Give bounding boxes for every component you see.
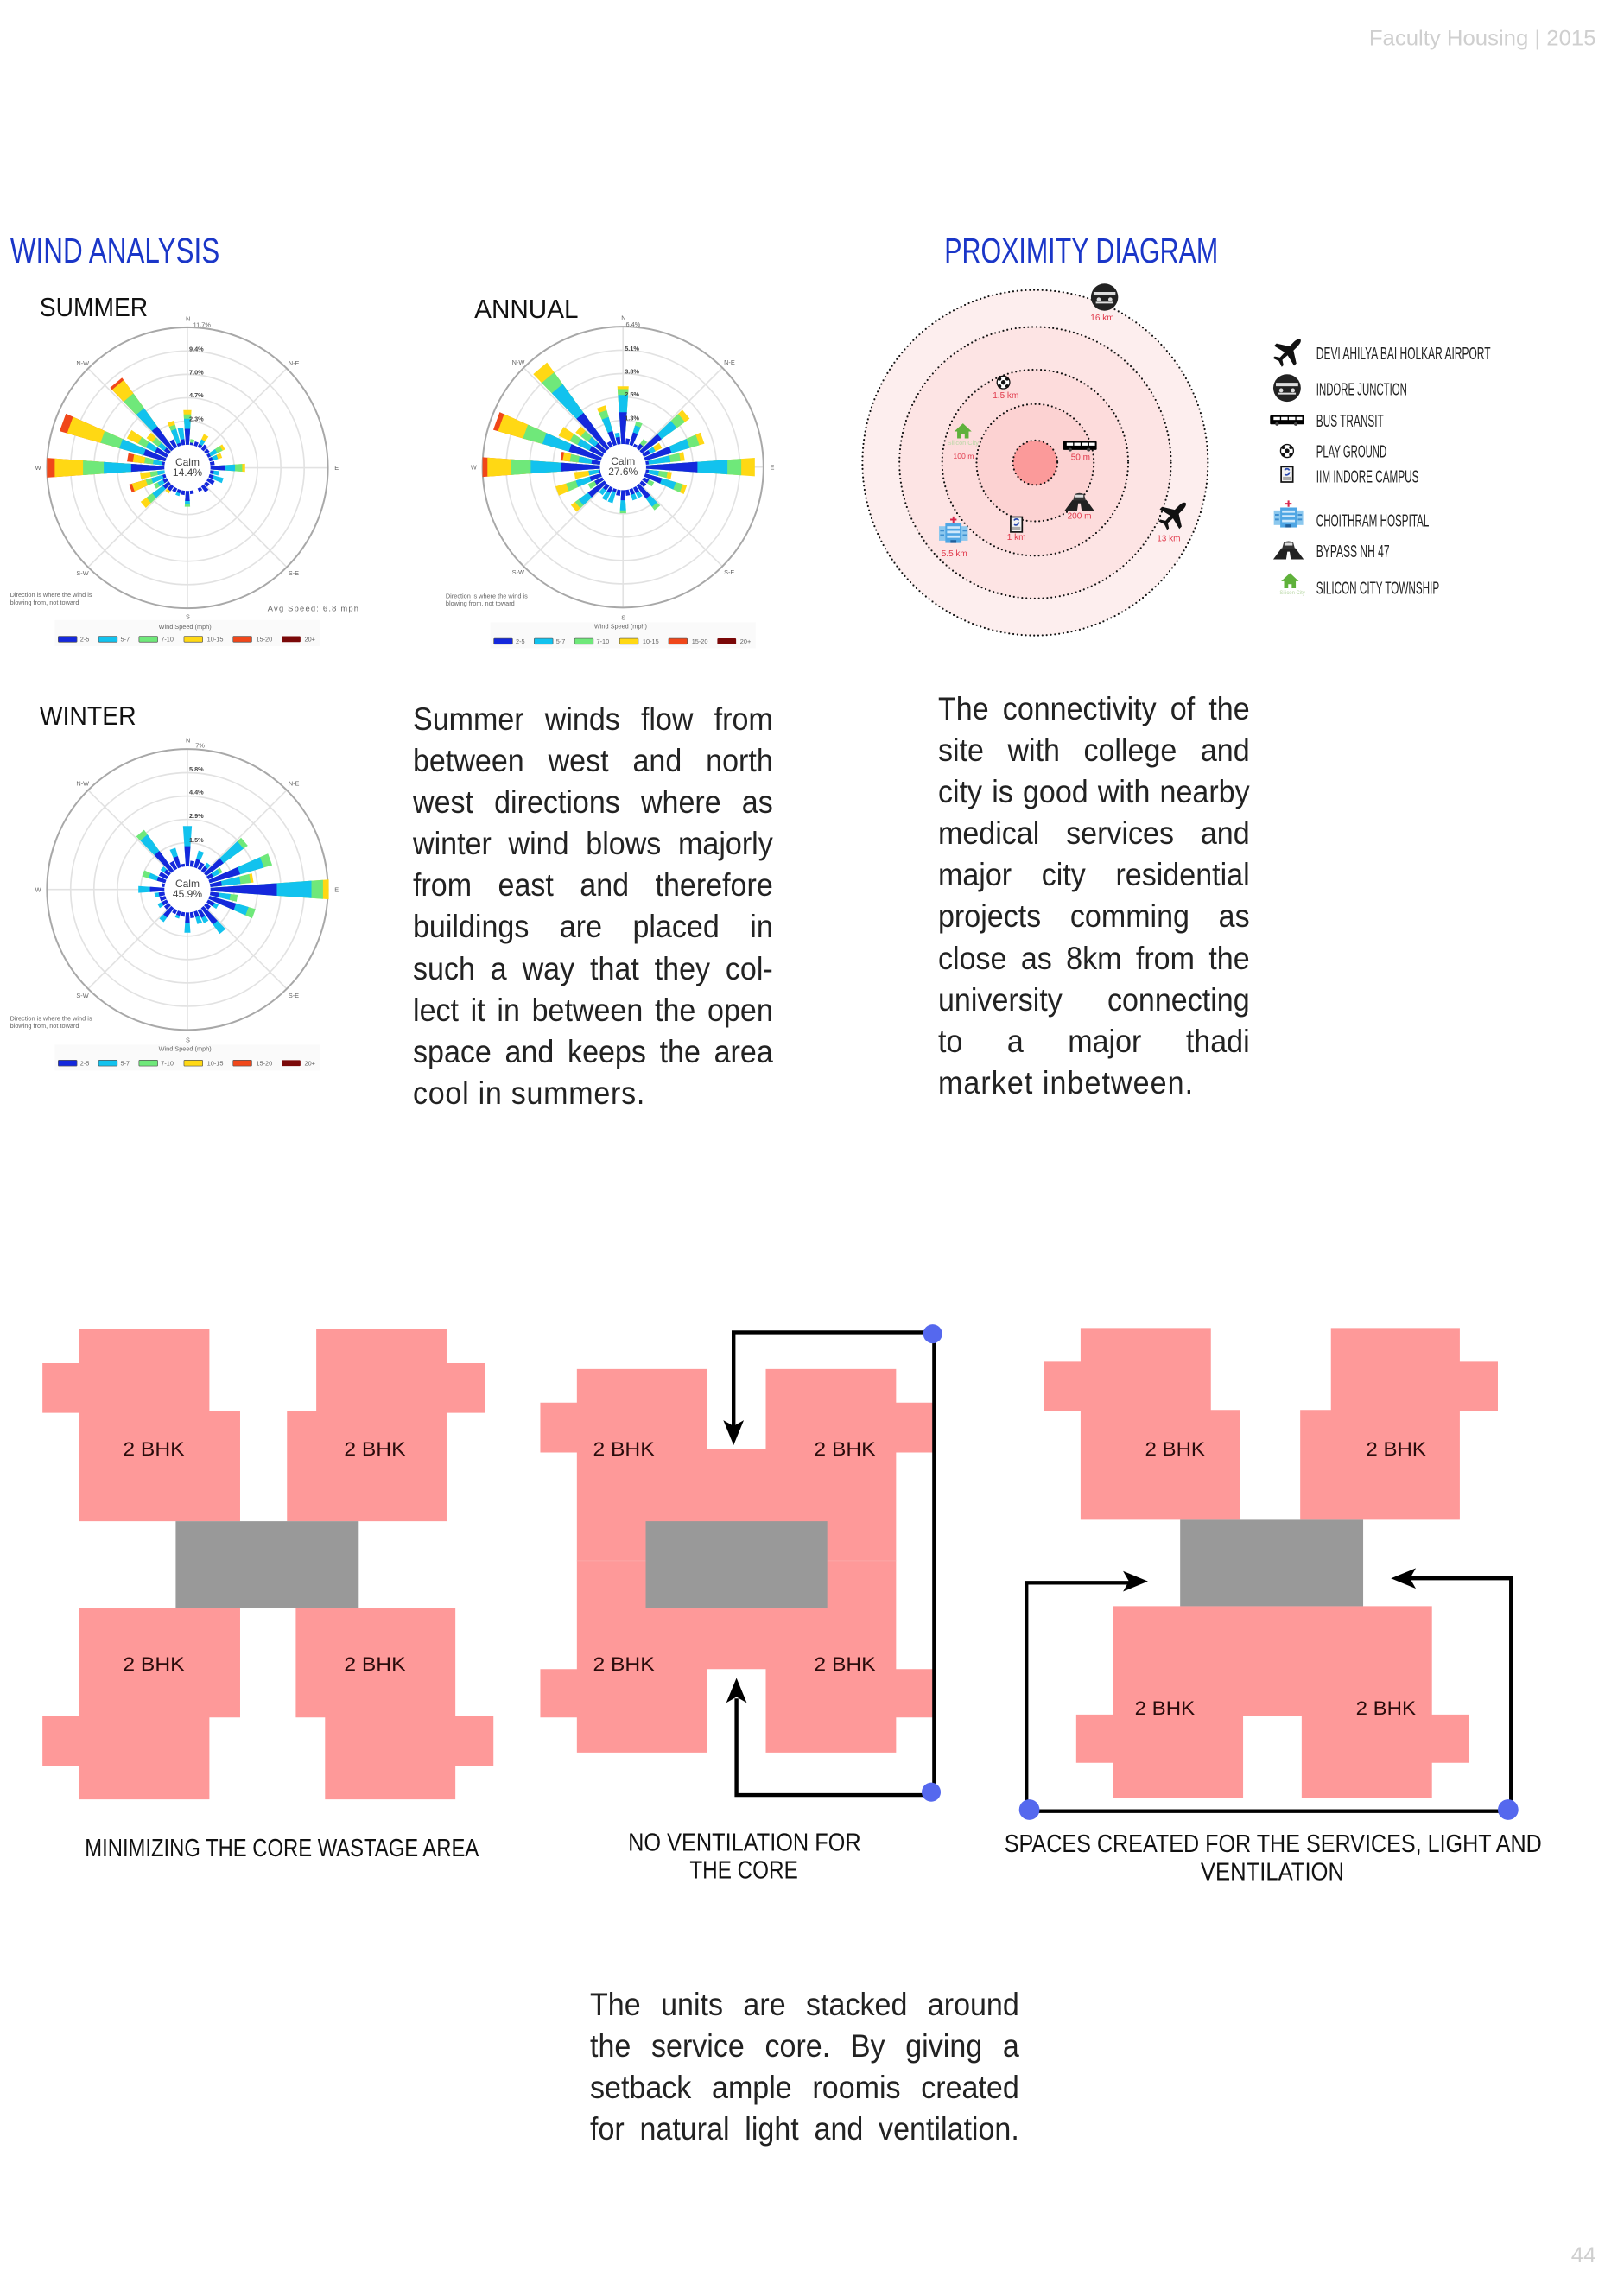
silicon city mark text: Silicon City (948, 439, 979, 447)
caption (1005, 1830, 1542, 1886)
radial percent labels: 2.9% (189, 812, 204, 820)
distance: 200 m: 200 m (1068, 511, 1091, 521)
service core (1180, 1519, 1363, 1606)
legend item: bypass (1273, 541, 1390, 561)
direction note (10, 1015, 92, 1030)
legend item: hospital (1274, 500, 1429, 530)
direction note: blowing from, not toward (446, 599, 515, 607)
distance: 16 km: 16 km (1090, 314, 1114, 323)
radial percent labels: 2.5% (625, 390, 639, 398)
calm value: 45.9% (173, 888, 202, 900)
diagram: no ventilation for the core (540, 1324, 942, 1885)
distance: 5.5 km: 5.5 km (942, 549, 967, 559)
legend item: hospital: CHOITHRAM HOSPITAL (1316, 511, 1429, 530)
unit labels (593, 1438, 876, 1675)
compass labels: N-E (289, 359, 300, 367)
legend item: campus: IIM INDORE CAMPUS (1316, 468, 1418, 487)
unit: top left 2 BHK (42, 1329, 240, 1521)
calm value: 14.4% (173, 466, 202, 479)
radial percent labels: 3.8% (625, 368, 639, 376)
text block: connectivity explanation: site with college and (938, 733, 1250, 768)
legend: wind speed: 7-10 (161, 1059, 174, 1067)
chart: winter wind rose (10, 736, 339, 1070)
legend: wind speed: 10-15 (207, 1059, 223, 1067)
text block: wind explanation: lect it in between the open (413, 993, 773, 1028)
compass labels: W (471, 463, 477, 471)
radial percent labels (189, 741, 205, 844)
service core (645, 1521, 828, 1608)
calm value (608, 455, 638, 478)
unit: bottom right 2 BHK (295, 1608, 493, 1799)
calm value: 27.6% (608, 466, 638, 478)
compass labels: W (35, 464, 41, 472)
distance: 50 m: 50 m (1071, 453, 1090, 462)
compass labels: S-E (289, 992, 299, 999)
unit labels: 2 BHK (814, 1438, 876, 1460)
radial percent labels (189, 321, 211, 422)
text block: connectivity explanation: university connecting (938, 982, 1250, 1018)
calm value: Calm (175, 456, 200, 468)
direction note: blowing from, not toward (10, 1022, 79, 1030)
text block: wind explanation: Summer winds flow from (413, 701, 773, 737)
radial percent labels: 7% (195, 741, 205, 749)
legend: wind speed: 7-10 (161, 636, 174, 644)
text block: stacking explanation: for natural light and ventilation. (590, 2111, 1019, 2147)
compass labels: N-W (76, 780, 89, 788)
distance: 1 km: 1 km (1007, 533, 1025, 542)
unit labels: 2 BHK (1135, 1697, 1195, 1719)
wedges: annual wind frequency by direction (483, 363, 755, 513)
radial percent labels: 1.5% (189, 836, 204, 844)
legend: wind speed: Wind Speed (mph) (594, 623, 647, 631)
compass labels: E (334, 464, 339, 472)
label: winter: WINTER (40, 701, 136, 731)
compass labels: S (621, 614, 625, 622)
legend item: play ground (1280, 443, 1386, 462)
direction note: Direction is where the wind is (10, 1015, 92, 1023)
text block: connectivity explanation: market inbetween. (938, 1065, 1194, 1100)
radial percent labels: 11.7% (193, 321, 211, 329)
distance: 1.5 km: 1.5 km (993, 391, 1018, 401)
text block: wind explanation: from east and therefore (413, 867, 773, 903)
radial percent labels: 2.3% (189, 415, 204, 422)
legend: wind speed (54, 620, 320, 646)
caption: MINIMIZING THE CORE WASTAGE AREA (85, 1835, 479, 1862)
compass labels: N (186, 736, 190, 744)
icon: bypass road (1064, 493, 1094, 511)
legend: wind speed: 20+ (740, 637, 751, 645)
text block: stacking explanation: setback ample roomis created (590, 2070, 1019, 2105)
icon: hospital (939, 517, 967, 543)
unit labels: 2 BHK (593, 1653, 655, 1675)
legend item: play ground: PLAY GROUND (1316, 443, 1386, 462)
page number: 44 (1571, 2243, 1596, 2267)
compass labels: S-W (76, 569, 89, 577)
caption: THE CORE (689, 1857, 798, 1885)
caption: SPACES CREATED FOR THE SERVICES, LIGHT AND (1005, 1830, 1542, 1858)
legend: wind speed: 15-20 (256, 1059, 272, 1067)
text block: wind explanation: west directions where as (413, 784, 773, 820)
compass labels: N-W (76, 359, 89, 367)
legend item: township: Silicon City (1279, 591, 1305, 596)
compass labels: S-E (724, 568, 734, 576)
legend: wind speed: Wind Speed (mph) (159, 1045, 212, 1053)
chart: proximity rings (862, 283, 1208, 636)
text block: wind explanation: such a way that they col- (413, 951, 773, 986)
compass labels (35, 314, 339, 621)
legend: wind speed: 5-7 (120, 636, 130, 644)
text block: wind explanation (413, 701, 773, 1111)
radial percent labels: 9.4% (189, 346, 204, 353)
calm value: Calm (175, 878, 200, 890)
compass labels: E (771, 463, 775, 471)
legend: wind speed: 15-20 (256, 636, 272, 644)
compass labels (471, 314, 775, 622)
compass labels: S (186, 613, 190, 621)
unit labels: 2 BHK (1366, 1438, 1426, 1460)
caption (628, 1829, 861, 1885)
calm value (173, 456, 202, 479)
legend item: bus: BUS TRANSIT (1316, 412, 1384, 431)
legend: wind speed: Wind Speed (mph) (159, 623, 212, 631)
page header: Faculty Housing | 2015: Faculty Housing | 2015 (1369, 27, 1596, 51)
text block: stacking explanation: The units are stacked around (590, 1987, 1019, 2022)
direction note: Direction is where the wind is (10, 591, 92, 599)
text block: connectivity explanation: close as 8km from the (938, 941, 1250, 976)
legend item: township (1279, 573, 1439, 598)
combined lower 2 BHK units (1076, 1606, 1469, 1798)
unit labels: 2 BHK (814, 1653, 876, 1675)
legend: wind speed: 20+ (305, 636, 315, 644)
legend: wind speed: 10-15 (207, 636, 223, 644)
direction note: blowing from, not toward (10, 599, 79, 606)
unit labels: 2 BHK (593, 1438, 655, 1460)
unit labels (123, 1438, 406, 1675)
legend: wind speed (491, 622, 756, 648)
wedges: winter wind frequency by direction (136, 826, 329, 934)
airflow arrows (1019, 1568, 1519, 1820)
compass labels: N (621, 314, 626, 321)
unit: top left 2 BHK (1044, 1328, 1240, 1519)
icon: silicon city township (955, 423, 972, 439)
direction note (10, 591, 92, 606)
distance: 100 m: 100 m (953, 452, 974, 460)
direction note (446, 593, 528, 607)
legend: wind speed (54, 1044, 320, 1070)
icon: play ground (997, 376, 1010, 389)
legend item: airport (1273, 339, 1491, 367)
radial percent labels: 1.3% (625, 415, 639, 422)
legend item: bus (1270, 412, 1384, 431)
text block: connectivity explanation: to a major thadi (938, 1024, 1250, 1059)
unit labels: 2 BHK (344, 1438, 406, 1460)
text block: connectivity explanation: city is good with nearby (938, 774, 1250, 809)
label: annual: ANNUAL (474, 295, 579, 324)
text block: wind explanation: between west and north (413, 743, 773, 778)
compass labels: S-W (76, 992, 89, 999)
diagram: spaces created for services, light and ventilation (1005, 1328, 1542, 1886)
heading: wind analysis: WIND ANALYSIS (10, 231, 219, 270)
legend: wind speed: 5-7 (120, 1059, 130, 1067)
text block: wind explanation: cool in summers. (413, 1075, 645, 1111)
legend: wind speed: 2-5 (80, 636, 89, 644)
label: summer: SUMMER (40, 293, 148, 322)
unit labels: 2 BHK (123, 1438, 185, 1460)
radial percent labels: 4.4% (189, 789, 204, 796)
unit: top right 2 BHK (287, 1329, 485, 1521)
text block: connectivity explanation (938, 691, 1250, 1100)
legend: wind speed: 15-20 (692, 637, 707, 645)
compass labels: S-W (512, 568, 524, 576)
icon: airport (1158, 503, 1186, 530)
unit labels: 2 BHK (344, 1653, 406, 1675)
text block: stacking explanation (590, 1987, 1019, 2147)
compass labels: S-E (289, 569, 299, 577)
chart: annual wind rose (446, 314, 775, 648)
legend item: junction: INDORE JUNCTION (1316, 381, 1407, 400)
compass labels (35, 736, 339, 1044)
text block: connectivity explanation: medical services and (938, 815, 1250, 851)
legend item: campus (1281, 466, 1418, 487)
legend: wind speed: 2-5 (516, 637, 525, 645)
caption: VENTILATION (1201, 1858, 1344, 1886)
unit: bottom left 2 BHK (42, 1608, 240, 1799)
legend item: bypass: BYPASS NH 47 (1316, 542, 1390, 561)
text block: wind explanation: winter wind blows majorly (413, 826, 773, 861)
radial percent labels: 7.0% (189, 368, 204, 376)
legend: wind speed: 2-5 (80, 1059, 89, 1067)
airflow arrows (723, 1324, 942, 1802)
unit labels: 2 BHK (1356, 1697, 1416, 1719)
compass labels: S (186, 1037, 190, 1044)
text block: wind explanation: buildings are placed in (413, 909, 773, 944)
legend item: airport: DEVI AHILYA BAI HOLKAR AIRPORT (1316, 345, 1491, 364)
compass labels: N (186, 314, 190, 322)
unit labels: 2 BHK (123, 1653, 185, 1675)
compass labels: N-E (724, 358, 735, 366)
heading: proximity diagram: PROXIMITY DIAGRAM (944, 231, 1218, 270)
radial percent labels: 4.7% (189, 391, 204, 399)
icon: bus transit (1063, 441, 1097, 452)
calm value (173, 878, 202, 900)
unit: top right 2 BHK (1300, 1328, 1498, 1519)
distance: 13 km: 13 km (1157, 535, 1181, 544)
unit labels (1135, 1438, 1426, 1719)
legend: wind speed: 7-10 (597, 637, 609, 645)
compass labels: N-E (289, 780, 300, 788)
text block: stacking explanation: the service core. By giving a (590, 2028, 1019, 2064)
legend item: junction (1273, 374, 1407, 402)
chart: summer wind rose (10, 314, 358, 646)
combined 2 BHK units (540, 1369, 934, 1753)
service core (175, 1521, 358, 1608)
text block: connectivity explanation: projects comming as (938, 898, 1250, 934)
radial percent labels: 5.8% (189, 765, 204, 773)
radial percent labels (625, 320, 641, 422)
icon: campus (1011, 517, 1022, 532)
legend: wind speed: 5-7 (556, 637, 565, 645)
text block: connectivity explanation: major city residential (938, 857, 1250, 892)
legend: wind speed: 20+ (305, 1059, 315, 1067)
radial percent labels: 5.1% (625, 345, 639, 352)
compass labels: W (35, 885, 41, 893)
text block: connectivity explanation: The connectivity of the (938, 691, 1250, 726)
legend: wind speed: 10-15 (643, 637, 659, 645)
diagram: minimizing the core wastage area (42, 1329, 493, 1862)
text block: wind explanation: space and keeps the area (413, 1034, 773, 1069)
caption: NO VENTILATION FOR (628, 1829, 861, 1856)
icon: railway junction (1091, 283, 1118, 311)
radial percent labels: 6.4% (626, 320, 641, 328)
legend: proximity (1270, 339, 1491, 598)
average speed: Avg Speed: 6.8 mph (268, 605, 358, 613)
calm value: Calm (611, 455, 635, 467)
unit labels: 2 BHK (1145, 1438, 1205, 1460)
legend item: township: SILICON CITY TOWNSHIP (1316, 579, 1439, 598)
compass labels: E (334, 885, 339, 893)
direction note: Direction is where the wind is (446, 593, 528, 600)
compass labels: N-W (512, 358, 524, 366)
wedges: summer wind frequency by direction (47, 377, 245, 508)
